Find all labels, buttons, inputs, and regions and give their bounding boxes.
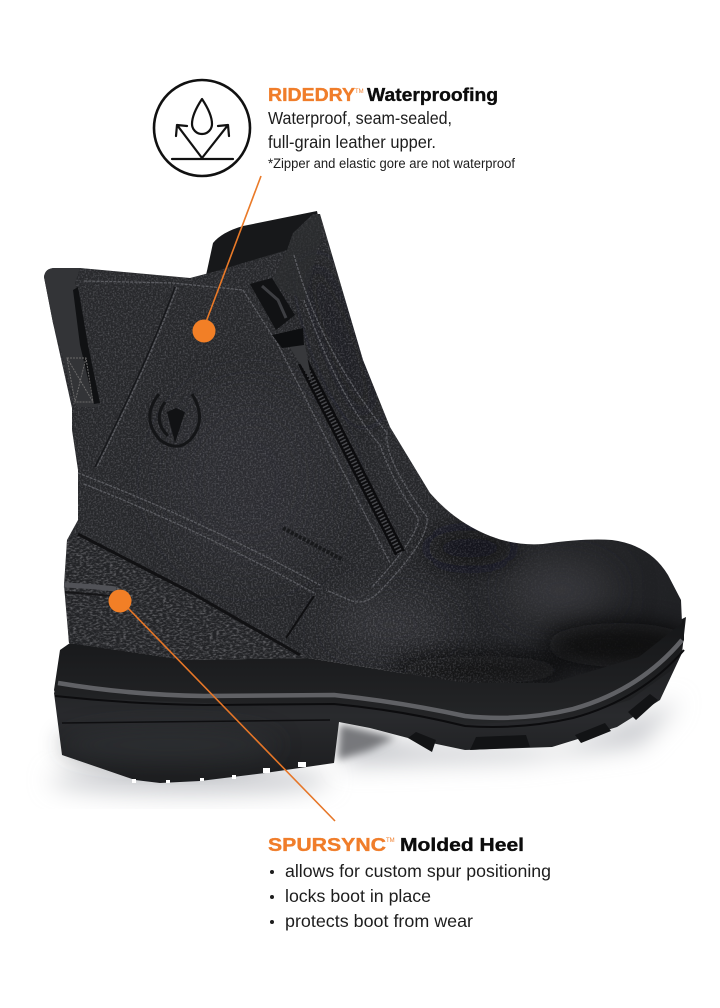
back pull tab — [44, 268, 100, 407]
leather grain — [54, 214, 581, 683]
outsole and heel — [54, 617, 686, 783]
leather shading — [40, 205, 695, 685]
waterproof embossed mark — [283, 528, 343, 560]
heading — [268, 835, 524, 855]
icon: waterproofing drop — [154, 80, 250, 176]
callout line: heel — [125, 605, 335, 821]
heel tread notches — [132, 762, 306, 783]
forefoot tread lugs — [408, 694, 658, 752]
callout dot: heel — [108, 590, 132, 612]
embossed logo — [150, 394, 200, 446]
text block: RIDEDRY Waterproofing — [268, 85, 515, 171]
heading: TM — [386, 838, 395, 844]
collar front edge — [270, 214, 322, 300]
callout line: waterproofing — [206, 176, 261, 322]
zipper — [250, 278, 400, 553]
seam stitching — [78, 255, 427, 602]
description: full-grain leather upper. — [268, 132, 436, 152]
footnote: *Zipper and elastic gore are not waterproof — [268, 156, 515, 171]
heading — [268, 85, 498, 105]
ground shadow — [50, 700, 680, 793]
bullet list: allows for custom spur positioning — [285, 861, 551, 881]
bullet list — [270, 861, 551, 931]
description: Waterproof, seam-sealed, — [268, 108, 452, 128]
boot photo illustration — [40, 205, 695, 783]
inner lining — [205, 211, 325, 300]
side seam — [286, 596, 314, 638]
bullet list: protects boot from wear — [285, 911, 473, 931]
heading: Molded Heel — [400, 835, 524, 855]
heel block highlight — [60, 727, 280, 763]
callout dot: waterproofing — [192, 320, 216, 342]
heading: Waterproofing — [367, 85, 498, 105]
heading: TM — [355, 89, 364, 95]
heel counter with geometric texture — [60, 530, 310, 662]
text block: SPURSYNC Molded Heel — [268, 835, 551, 931]
leather upper — [44, 214, 682, 683]
heading: SPURSYNC — [268, 835, 386, 855]
midsole — [54, 620, 684, 725]
description — [268, 108, 452, 152]
heading: RIDEDRY — [268, 85, 355, 105]
grey sole stripe — [58, 640, 682, 718]
bullet list: locks boot in place — [285, 886, 431, 906]
